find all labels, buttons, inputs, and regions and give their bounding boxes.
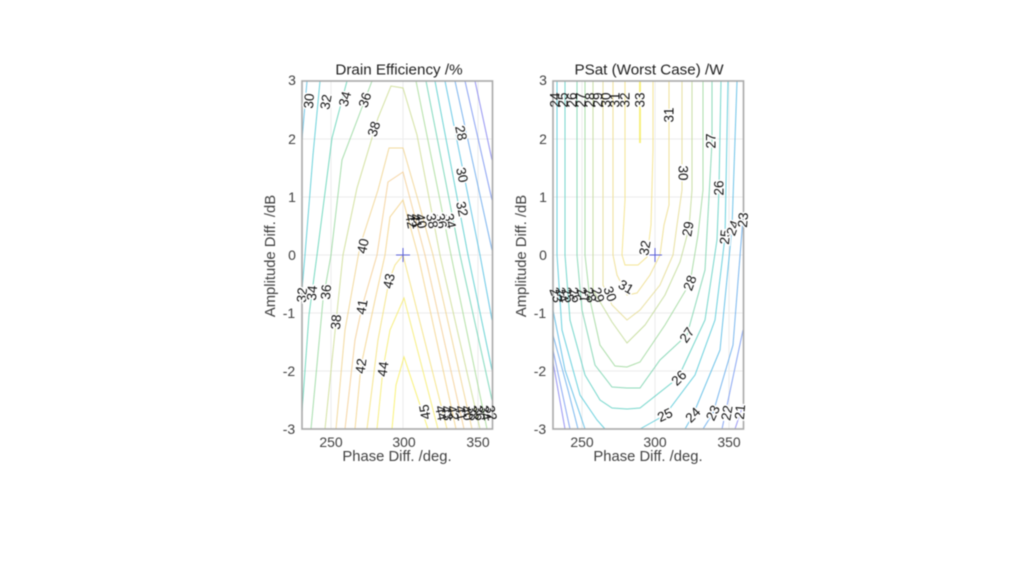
axes frame: [302, 81, 492, 429]
contour value labels: 24: [723, 218, 743, 238]
x axis ticks: [570, 434, 741, 450]
contour value labels: 44: [375, 360, 392, 377]
contour value labels: 26: [712, 180, 726, 196]
contour value labels: 36: [470, 404, 488, 422]
contour value labels: 25: [655, 405, 675, 425]
contour value labels: 25: [558, 285, 578, 305]
contour value labels: 41: [452, 404, 470, 422]
y axis ticks: 3: [539, 72, 547, 88]
marker: operating point cross: [648, 248, 662, 262]
contour value labels: 23: [546, 285, 566, 305]
contour value labels: 32: [618, 92, 632, 108]
contour value labels: 24: [548, 92, 562, 108]
contour lines: drain efficiency: [302, 81, 492, 429]
contour value labels: 24: [552, 285, 572, 305]
contour value labels: 32: [294, 287, 310, 303]
x axis ticks: [319, 434, 490, 450]
y axis ticks: [534, 72, 547, 437]
y axis ticks: 1: [288, 189, 296, 205]
contour value labels: 36: [318, 284, 334, 300]
contour value labels: 29: [590, 92, 606, 108]
contour value labels: 28: [452, 124, 470, 142]
contour value labels: 31: [662, 107, 676, 123]
y axis ticks: [283, 72, 296, 437]
contour value labels: 41: [407, 212, 425, 230]
y axis ticks: 0: [539, 247, 547, 263]
x axis ticks: 250: [319, 434, 343, 450]
contour value labels: 36: [356, 91, 374, 109]
contour value labels: 30: [598, 92, 614, 108]
x axis title: Phase Diff. /deg.: [342, 449, 452, 465]
contour value labels: 31: [616, 277, 636, 297]
contour value labels: 38: [423, 212, 441, 230]
contour value labels: [546, 92, 751, 426]
y axis ticks: 0: [288, 247, 296, 263]
contour value labels: 45: [416, 403, 434, 421]
y axis ticks: 2: [288, 131, 296, 147]
contour value labels: 27: [573, 285, 593, 305]
y axis ticks: 1: [539, 189, 547, 205]
contour value labels: 34: [304, 284, 320, 301]
y axis ticks: -3: [534, 421, 546, 437]
contour value labels: 23: [703, 403, 723, 423]
contour value labels: 44: [432, 404, 450, 422]
contour value labels: 42: [402, 212, 420, 230]
y axis ticks: -2: [534, 363, 546, 379]
contour value labels: 32: [453, 200, 471, 218]
contour value labels: 29: [679, 220, 697, 238]
contour value labels: 24: [682, 404, 704, 426]
contour value labels: 38: [328, 314, 344, 330]
contour value labels: 34: [336, 89, 354, 108]
contour value labels: 43: [380, 272, 398, 290]
contour value labels: 41: [353, 298, 371, 316]
contour value labels: 27: [574, 92, 588, 108]
contour value labels: 32: [482, 404, 500, 422]
x axis ticks: 350: [717, 434, 741, 450]
x axis ticks: 300: [643, 434, 667, 450]
contour value labels: 29: [588, 285, 608, 305]
y axis ticks: -1: [283, 305, 295, 321]
contour value labels: 42: [353, 358, 369, 374]
contour value labels: 28: [680, 273, 700, 293]
axes frame: [553, 81, 744, 429]
contour value labels: 30: [676, 165, 690, 181]
y axis ticks: 3: [288, 72, 296, 88]
contour value labels: 26: [668, 367, 690, 389]
contour value labels: 38: [464, 404, 482, 422]
y axis ticks: 2: [539, 131, 547, 147]
contour lines: PSat: [553, 81, 743, 429]
y axis title: Amplitude Diff. /dB: [263, 195, 279, 317]
contour value labels: 31: [608, 92, 622, 108]
contour value labels: 23: [735, 212, 751, 228]
contour value labels: 25: [717, 229, 733, 245]
marker: operating point cross: [396, 248, 410, 262]
contour value labels: 30: [301, 93, 317, 109]
x axis ticks: 300: [392, 434, 416, 450]
y axis ticks: -2: [283, 363, 295, 379]
contour value labels: 33: [632, 92, 648, 108]
x axis ticks: 350: [466, 434, 490, 450]
contour value labels: 42: [444, 404, 462, 422]
contour value labels: 21: [732, 404, 748, 420]
contour value labels: 36: [432, 212, 450, 230]
heading: PSat worst case: PSat (Worst Case) /W: [574, 62, 724, 78]
contour value labels: 40: [458, 404, 476, 422]
panel: drain efficiency contour plot: [263, 62, 500, 465]
contour value labels: 34: [476, 404, 494, 422]
contour value labels: 26: [565, 285, 585, 305]
contour value labels: 27: [704, 133, 718, 149]
y axis ticks: -3: [283, 421, 295, 437]
contour value labels: 22: [718, 404, 736, 422]
contour value labels: 30: [600, 284, 620, 304]
panel: PSat worst case contour plot: [514, 62, 751, 465]
contour value labels: 40: [354, 237, 372, 255]
contour value labels: 43: [438, 404, 456, 422]
contour value labels: 27: [677, 325, 697, 345]
contour value labels: 38: [365, 120, 383, 138]
contour value labels: 28: [582, 92, 598, 108]
x axis title: Phase Diff. /deg.: [593, 449, 703, 465]
y axis title: Amplitude Diff. /dB: [514, 195, 530, 317]
contour value labels: 30: [453, 166, 471, 184]
grid lines: [553, 81, 743, 429]
heading: drain efficiency: Drain Efficiency /%: [335, 62, 463, 78]
contour value labels: 25: [556, 92, 570, 108]
contour value labels: 26: [564, 92, 580, 108]
contour value labels: 32: [636, 239, 654, 257]
x axis ticks: 250: [570, 434, 594, 450]
contour value labels: 32: [317, 93, 335, 111]
contour value labels: 28: [580, 285, 600, 305]
contour value labels: 40: [412, 212, 430, 230]
y axis ticks: -1: [534, 305, 546, 321]
grid lines: [302, 81, 492, 429]
contour value labels: 34: [441, 212, 459, 230]
contour value labels: [294, 89, 500, 422]
